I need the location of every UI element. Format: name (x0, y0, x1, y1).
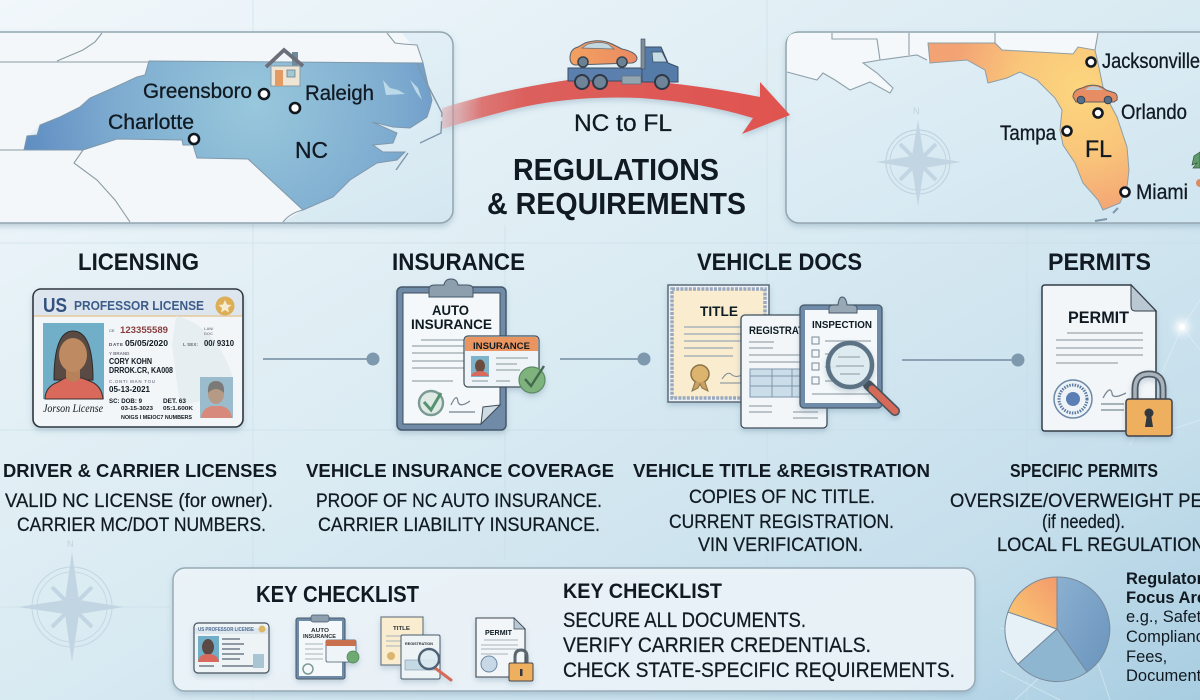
pie legend text: Fees, (1126, 648, 1167, 666)
checklist text: KEY CHECKLIST (563, 580, 722, 603)
text block: driver and carrier licenses (3, 460, 277, 536)
pie legend text (1126, 570, 1200, 685)
truck body (568, 68, 642, 81)
icon: driver license card: US (43, 295, 67, 317)
text block: driver and carrier licenses: CARRIER MC/DOT NUMBERS. (17, 515, 266, 536)
inspection clipboard: INSPECTION (812, 319, 872, 331)
mini icon: vehicle docs: REGISTRATION (405, 641, 433, 646)
title certificate: TITLE (700, 303, 738, 319)
license fields: CORY KOHN (109, 357, 152, 366)
state label: NC: NC (295, 137, 328, 163)
license fields: C.ONTI MAN TOU (109, 379, 155, 384)
keys (1095, 208, 1118, 221)
neighbouring land (0, 33, 423, 222)
license fields: Y BRAND (109, 351, 130, 356)
city dots (1062, 58, 1130, 196)
city label: Raleigh: Raleigh (305, 82, 374, 105)
license fields: 00/ 9310 (204, 339, 235, 348)
mini icon: insurance: INSURANCE (303, 634, 337, 640)
mini icon: insurance (296, 615, 359, 679)
text block: vehicle insurance coverage: CARRIER LIABILITY INSURANCE. (318, 515, 600, 536)
icon: car on Florida (1073, 85, 1117, 104)
license fields (109, 325, 235, 421)
compass rose: bottom left (18, 539, 124, 662)
compass rose: Gulf: N (913, 106, 920, 116)
text block: driver and carrier licenses: VALID NC LICENSE (for owner). (5, 491, 273, 512)
portrait (43, 323, 104, 399)
icon: permit document with padlock: PERMIT (1068, 308, 1130, 327)
coast and state borders (787, 33, 1098, 93)
license fields: DATE (109, 342, 123, 347)
title (487, 152, 746, 221)
city label: Tampa: Tampa (1000, 122, 1056, 145)
title certificate (668, 285, 769, 402)
license fields: 05:1.600K (163, 406, 193, 412)
icon: driver license card: PROFESSOR LICENSE (74, 298, 204, 313)
green check (519, 366, 545, 393)
registration sheet (741, 315, 827, 428)
inspection clipboard (800, 297, 882, 408)
checklist text: CHECK STATE-SPECIFIC REQUIREMENTS. (563, 659, 955, 682)
license fields: 03-15-3023 (121, 406, 153, 412)
text block: vehicle title and registration: VEHICLE TITLE &REGISTRATION (633, 460, 930, 481)
checklist text (563, 580, 955, 682)
connector: vehicle docs to permits (902, 354, 1024, 366)
text block: vehicle title and registration (633, 460, 930, 556)
license fields: 123355589 (120, 325, 168, 336)
padlock (1126, 374, 1172, 436)
panel: Florida map (786, 32, 1200, 223)
heading: Vehicle Docs: VEHICLE DOCS (697, 249, 862, 276)
title: REGULATIONS (513, 152, 719, 187)
neighbouring land (787, 33, 1098, 93)
icon: auto insurance clipboard: INSURANCE (411, 317, 492, 332)
checklist heading: KEY CHECKLIST (256, 581, 419, 607)
insurance card (464, 336, 539, 387)
text block: specific permits: SPECIFIC PERMITS (1010, 460, 1158, 481)
mini icon: vehicle docs: TITLE (393, 626, 411, 632)
icon: palm tree (1192, 152, 1200, 187)
NC state shape (24, 61, 432, 210)
icon: auto insurance clipboard (397, 279, 545, 430)
panel: North Carolina map (0, 32, 453, 223)
connector: licensing to insurance (263, 352, 380, 366)
heading: Insurance: INSURANCE (392, 249, 525, 276)
text block: driver and carrier licenses: DRIVER & CARRIER LICENSES (3, 460, 277, 481)
icon: permit document with padlock (1042, 285, 1172, 436)
city label: Greensboro: Greensboro (143, 80, 252, 103)
license fields: L SEX: (183, 342, 198, 347)
license fields: NOIGS I MEIOC7 NUMBERS (121, 415, 192, 421)
city label: Orlando: Orlando (1121, 101, 1187, 124)
heading: Permits: PERMITS (1048, 249, 1151, 276)
text block: specific permits: (if needed). (1042, 512, 1125, 533)
icon: vehicle documents (668, 285, 895, 428)
icon: driver license card (33, 289, 243, 427)
text block: specific permits (950, 460, 1200, 556)
title: & REQUIREMENTS (487, 186, 746, 221)
license fields: DRROK.CR, KA008 (109, 366, 173, 375)
icon: house (266, 50, 303, 86)
Florida state shape (928, 43, 1129, 210)
sounds and outer banks (383, 80, 422, 100)
text block: vehicle title and registration: CURRENT REGISTRATION. (669, 512, 894, 533)
license fields: DET. 63 (163, 399, 187, 405)
check seal (419, 391, 443, 415)
signature: Jorson License (43, 401, 104, 415)
license fields: 05-13-2021 (109, 385, 151, 394)
text block: vehicle insurance coverage: VEHICLE INSURANCE COVERAGE (306, 460, 614, 481)
checklist text: VERIFY CARRIER CREDENTIALS. (563, 634, 871, 657)
text block: vehicle insurance coverage (306, 460, 614, 536)
text block: vehicle insurance coverage: PROOF OF NC AUTO INSURANCE. (316, 491, 602, 512)
state borders (0, 33, 423, 222)
text block: vehicle title and registration: COPIES OF NC TITLE. (689, 487, 875, 508)
arrow: NC to FL route (442, 78, 790, 134)
city label: Charlotte: Charlotte (108, 111, 194, 134)
compass rose: bottom left: N (67, 539, 74, 549)
route label: NC to FL (574, 110, 672, 137)
mini icon: insurance: AUTO (311, 628, 329, 634)
city label: Miami: Miami (1136, 181, 1188, 204)
registration sheet: REGISTRAT (749, 325, 804, 337)
mini icon: license: US PROFESSOR LICENSE (198, 627, 255, 633)
license fields: SC: DOB: 9 (109, 399, 143, 405)
magnifier (828, 343, 895, 411)
compass rose: Gulf (876, 106, 961, 206)
checklist text: SECURE ALL DOCUMENTS. (563, 609, 806, 632)
mini icon: permit: PERMIT (485, 630, 513, 637)
license fields: CE (109, 328, 115, 333)
mini icon: permit (476, 618, 533, 681)
license fields: DOC (204, 331, 213, 336)
mini icon: license (194, 623, 269, 673)
mini icon: vehicle docs (381, 617, 451, 680)
heading: Licensing: LICENSING (78, 249, 199, 276)
icon: auto insurance clipboard: AUTO (432, 303, 469, 318)
pie chart: regulatory focus areas (1005, 577, 1110, 682)
license fields: LAN/ (204, 326, 214, 331)
car on flatbed (570, 41, 637, 67)
panel: key checklist (173, 568, 975, 691)
official seal (1054, 380, 1092, 418)
insurance card: INSURANCE (473, 341, 530, 352)
connector: insurance to vehicle docs (560, 352, 650, 366)
text block: vehicle title and registration: VIN VERIFICATION. (698, 535, 863, 556)
icon: car transporter truck (568, 39, 678, 89)
license fields: 05/05/2020 (125, 339, 169, 348)
city dots (189, 89, 300, 144)
state label: FL: FL (1085, 136, 1112, 163)
secondary portrait (200, 377, 233, 418)
